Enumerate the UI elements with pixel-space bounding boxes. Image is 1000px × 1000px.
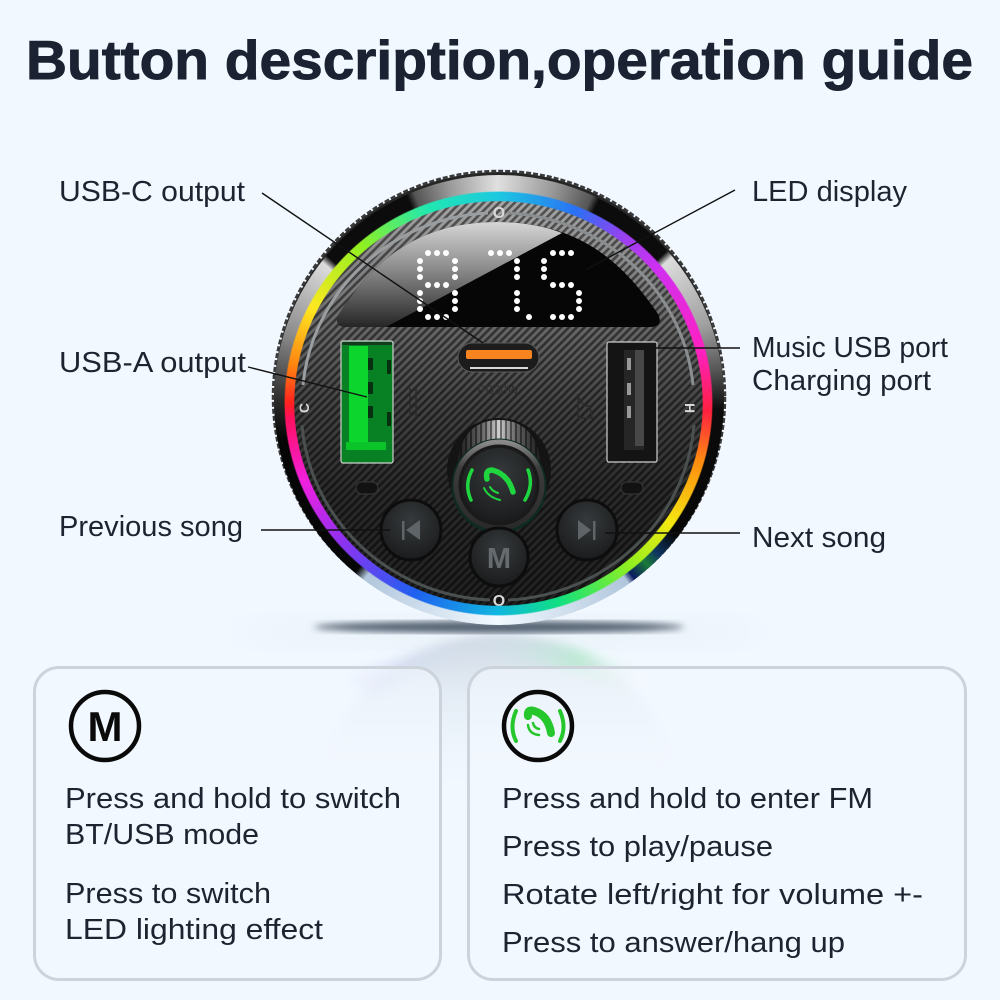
device: car charger front [272,170,726,625]
LED digits [417,250,582,320]
LED display window [337,222,660,327]
text: knob instructions: Press and hold to enter FM [502,783,873,815]
panel: M button [33,666,442,981]
label: next song: Next song [752,522,886,554]
text: M button instructions: BT/USB mode [65,819,259,851]
text: M button instructions: LED lighting effect [65,914,323,946]
text: knob instructions [502,783,923,959]
label: USB-C output: USB-C output [59,176,245,208]
text: knob instructions: Press to answer/hang up [502,927,845,959]
ring marks: O [493,593,505,610]
previous button [381,500,441,560]
text: M button instructions: Press and hold to switch [65,783,401,815]
rainbow LED ring [284,191,713,616]
text: knob instructions: Press to play/pause [502,831,773,863]
label: previous song: Previous song [59,511,243,543]
USB-C orange port [458,343,539,372]
label: LED display: LED display [752,176,907,208]
carbon fibre plate with controls [294,201,703,610]
PD30W label: PD30W [477,383,519,397]
icon: green phone [502,690,574,762]
label: music USB and charging port: Charging port [752,365,931,397]
M button [470,528,528,586]
text: M button instructions [65,783,401,946]
M button: M [487,543,511,575]
label: USB-A output: USB-A output [59,347,246,379]
music USB port [607,342,657,462]
rotary knob [447,418,551,532]
inner ring groove [302,213,694,600]
label: music USB and charging port: Music USB port [752,332,948,364]
text: M button instructions: Press to switch [65,878,271,910]
indicator slots [356,482,643,494]
phone icon on knob [468,470,530,500]
text: knob instructions: Rotate left/right for volume +- [502,879,923,911]
leader lines [248,189,740,534]
ring marks: O [493,205,505,222]
label: music USB and charging port [752,332,948,397]
metal rim [274,175,724,625]
icon: M: M [88,703,122,750]
ring marks [296,205,698,610]
panel: knob [467,666,967,981]
port glyph labels [410,388,592,418]
icon: M [68,690,142,762]
callout labels [59,176,948,554]
title: Button description,operation guide [26,29,973,91]
ring marks: C [296,403,312,413]
USB-A green port [341,341,393,463]
knurled outer edge [272,170,726,585]
ring marks: H [682,403,698,413]
next button [557,500,617,560]
